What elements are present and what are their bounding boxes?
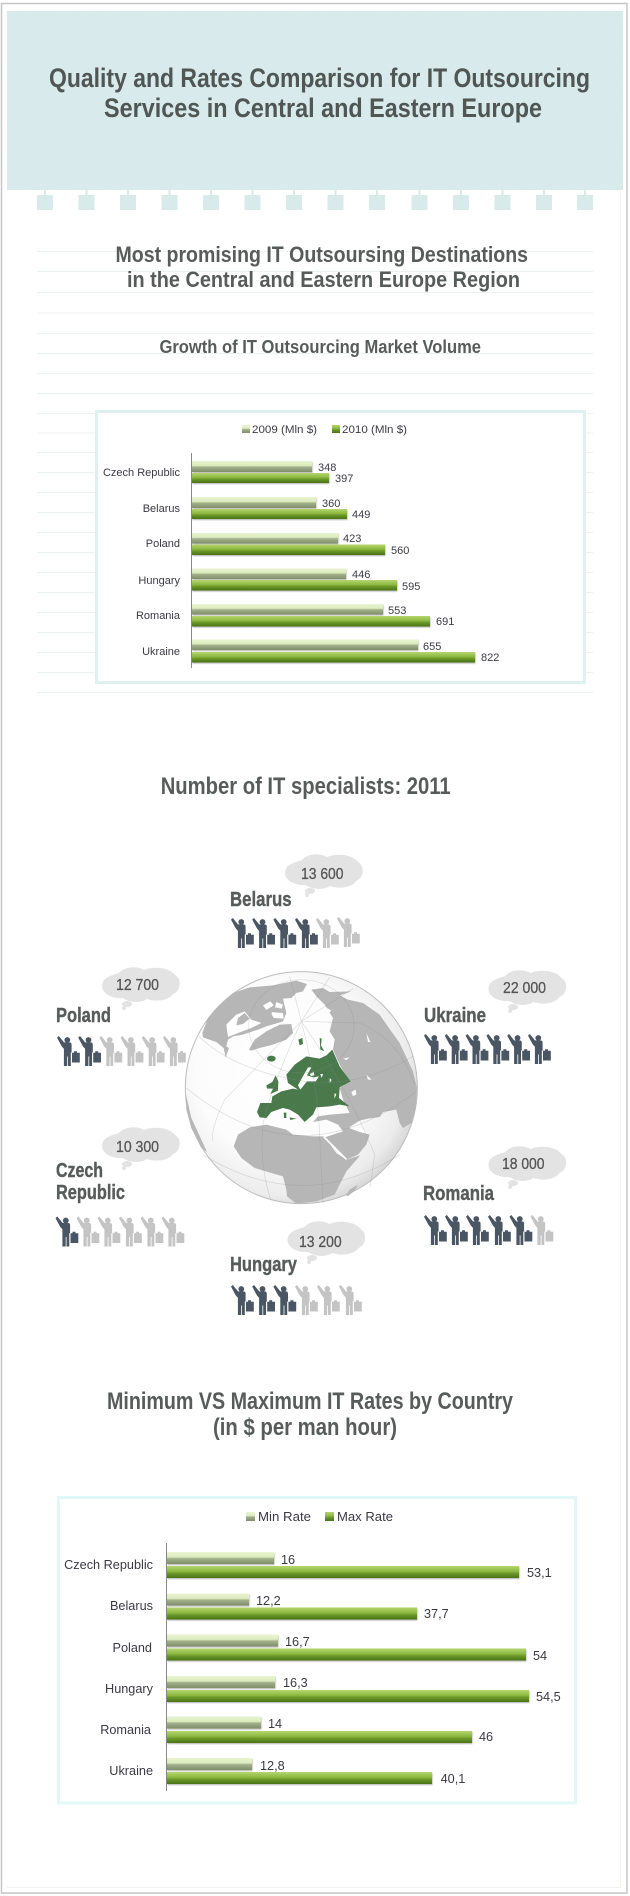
legend: 2010 (Mln $) xyxy=(342,424,407,436)
icons: Ukraine xyxy=(424,1034,551,1064)
category labels xyxy=(103,467,181,658)
section heading: rates xyxy=(107,1388,514,1441)
section heading: rates: (in $ per man hour) xyxy=(213,1414,397,1441)
value: Czech Republic: 10 300 xyxy=(116,1139,159,1156)
globe xyxy=(185,972,417,1204)
group: Romania xyxy=(423,1146,566,1245)
legend: Min Rate xyxy=(258,1510,311,1524)
value labels: 54,5 xyxy=(536,1690,561,1704)
thought bubble: Ukraine xyxy=(488,970,566,1013)
value: Ukraine: 22 000 xyxy=(503,980,546,997)
thought bubble: Belarus xyxy=(285,854,363,897)
value labels: 40,1 xyxy=(441,1772,465,1786)
icons: Poland xyxy=(57,1036,186,1066)
value: Hungary: 13 200 xyxy=(299,1234,342,1251)
title line 2: Services in Central and Eastern Europe xyxy=(104,93,542,123)
value: Romania: 18 000 xyxy=(502,1156,545,1173)
bars xyxy=(192,461,475,662)
seas and lakes xyxy=(324,1008,372,1159)
group: Hungary xyxy=(230,1221,365,1315)
value labels: 53,1 xyxy=(527,1566,552,1580)
bars xyxy=(167,1552,529,1784)
icons: Hungary xyxy=(231,1285,362,1315)
land: Africa xyxy=(234,1125,360,1204)
value labels: 360 xyxy=(322,498,340,510)
value labels xyxy=(318,462,499,664)
category labels: Czech Republic xyxy=(64,1558,154,1572)
value labels: 12,8 xyxy=(260,1759,285,1773)
value labels: 54 xyxy=(533,1649,547,1663)
category labels: Hungary xyxy=(105,1682,154,1696)
land: Greenland xyxy=(249,1024,293,1051)
value: Poland: 12 700 xyxy=(116,977,159,994)
value labels: 16,7 xyxy=(285,1635,310,1649)
category labels: Ukraine xyxy=(142,646,180,658)
value: Belarus: 13 600 xyxy=(301,866,344,883)
grid lines xyxy=(186,976,416,1203)
category labels: Romania xyxy=(136,610,181,622)
value labels: 655 xyxy=(423,641,441,653)
value labels: 16 xyxy=(281,1553,295,1567)
category labels: Hungary xyxy=(138,575,180,587)
panel: market volume bar chart xyxy=(96,412,584,682)
value labels: 348 xyxy=(318,462,336,474)
Europe highlight xyxy=(257,1038,351,1122)
icons: Belarus xyxy=(231,917,360,948)
header banner xyxy=(7,11,623,210)
section heading: destinations: Most promising IT Outsoursing Destinations xyxy=(116,242,528,267)
value labels: 12,2 xyxy=(256,1594,281,1608)
label: Romania: Romania xyxy=(423,1182,494,1205)
label: Czech Republic: Republic xyxy=(56,1181,125,1204)
category labels: Belarus xyxy=(110,1599,153,1613)
category labels: Ukraine xyxy=(109,1764,153,1778)
category labels xyxy=(64,1558,154,1778)
category labels: Czech Republic xyxy=(103,467,180,479)
value labels: 449 xyxy=(352,509,370,521)
land: Asia xyxy=(311,988,417,1160)
legend: 2009 (Mln $) xyxy=(252,424,317,436)
land: South America edge and Madagascar xyxy=(186,1095,358,1196)
icons: Czech Republic xyxy=(56,1216,184,1246)
label: Czech Republic xyxy=(56,1159,125,1204)
value labels: 595 xyxy=(402,581,420,593)
label: Belarus: Belarus xyxy=(230,888,292,911)
value labels: 822 xyxy=(481,652,499,664)
axis xyxy=(191,453,192,668)
value labels: 423 xyxy=(343,533,361,545)
value labels: 14 xyxy=(268,1717,282,1731)
thought bubble: Hungary xyxy=(288,1221,365,1264)
panel: IT rates bar chart xyxy=(58,1498,576,1803)
label: Hungary: Hungary xyxy=(230,1253,297,1276)
thought bubble: Romania xyxy=(488,1146,566,1189)
value labels: 46 xyxy=(479,1730,493,1744)
value labels: 37,7 xyxy=(424,1607,449,1621)
group: Czech Republic xyxy=(56,1127,184,1246)
category labels: Romania xyxy=(100,1723,152,1737)
value labels: 691 xyxy=(436,616,454,628)
value labels: 16,3 xyxy=(283,1676,308,1690)
section heading: destinations: in the Central and Eastern Europe Region xyxy=(127,267,520,292)
icons: Romania xyxy=(424,1215,553,1245)
land: Baffin and arctic islands xyxy=(236,1011,272,1025)
subheading: market volume: Growth of IT Outsourcing Market Volume xyxy=(160,336,481,357)
label: Poland: Poland xyxy=(56,1004,111,1027)
category labels: Poland xyxy=(146,538,180,550)
section heading: destinations xyxy=(116,242,528,292)
legend xyxy=(246,1510,393,1524)
legend xyxy=(242,424,407,436)
section heading: IT specialists: Number of IT specialists: 2011 xyxy=(161,773,451,800)
label: Ukraine: Ukraine xyxy=(424,1004,486,1027)
value labels: 560 xyxy=(391,545,409,557)
sea: Hudson Bay and arctic channels xyxy=(226,1001,284,1037)
category labels: Belarus xyxy=(143,503,180,515)
value labels: 397 xyxy=(335,473,353,485)
axis xyxy=(166,1543,167,1791)
thought bubble: Poland xyxy=(102,967,180,1010)
group: Belarus xyxy=(230,854,363,948)
group: Poland xyxy=(56,967,186,1066)
ruled lines xyxy=(37,252,593,692)
value labels xyxy=(256,1553,561,1786)
label: Czech Republic: Czech xyxy=(56,1159,103,1182)
land: North America xyxy=(202,981,307,1057)
group: Ukraine xyxy=(424,970,566,1064)
legend: Max Rate xyxy=(337,1510,393,1524)
section heading: rates: Minimum VS Maximum IT Rates by Country xyxy=(107,1388,514,1415)
value labels: 553 xyxy=(388,605,406,617)
value labels: 446 xyxy=(352,569,370,581)
category labels: Poland xyxy=(112,1641,152,1655)
thought bubble: Czech Republic xyxy=(102,1127,180,1170)
notebook tabs xyxy=(37,190,593,210)
